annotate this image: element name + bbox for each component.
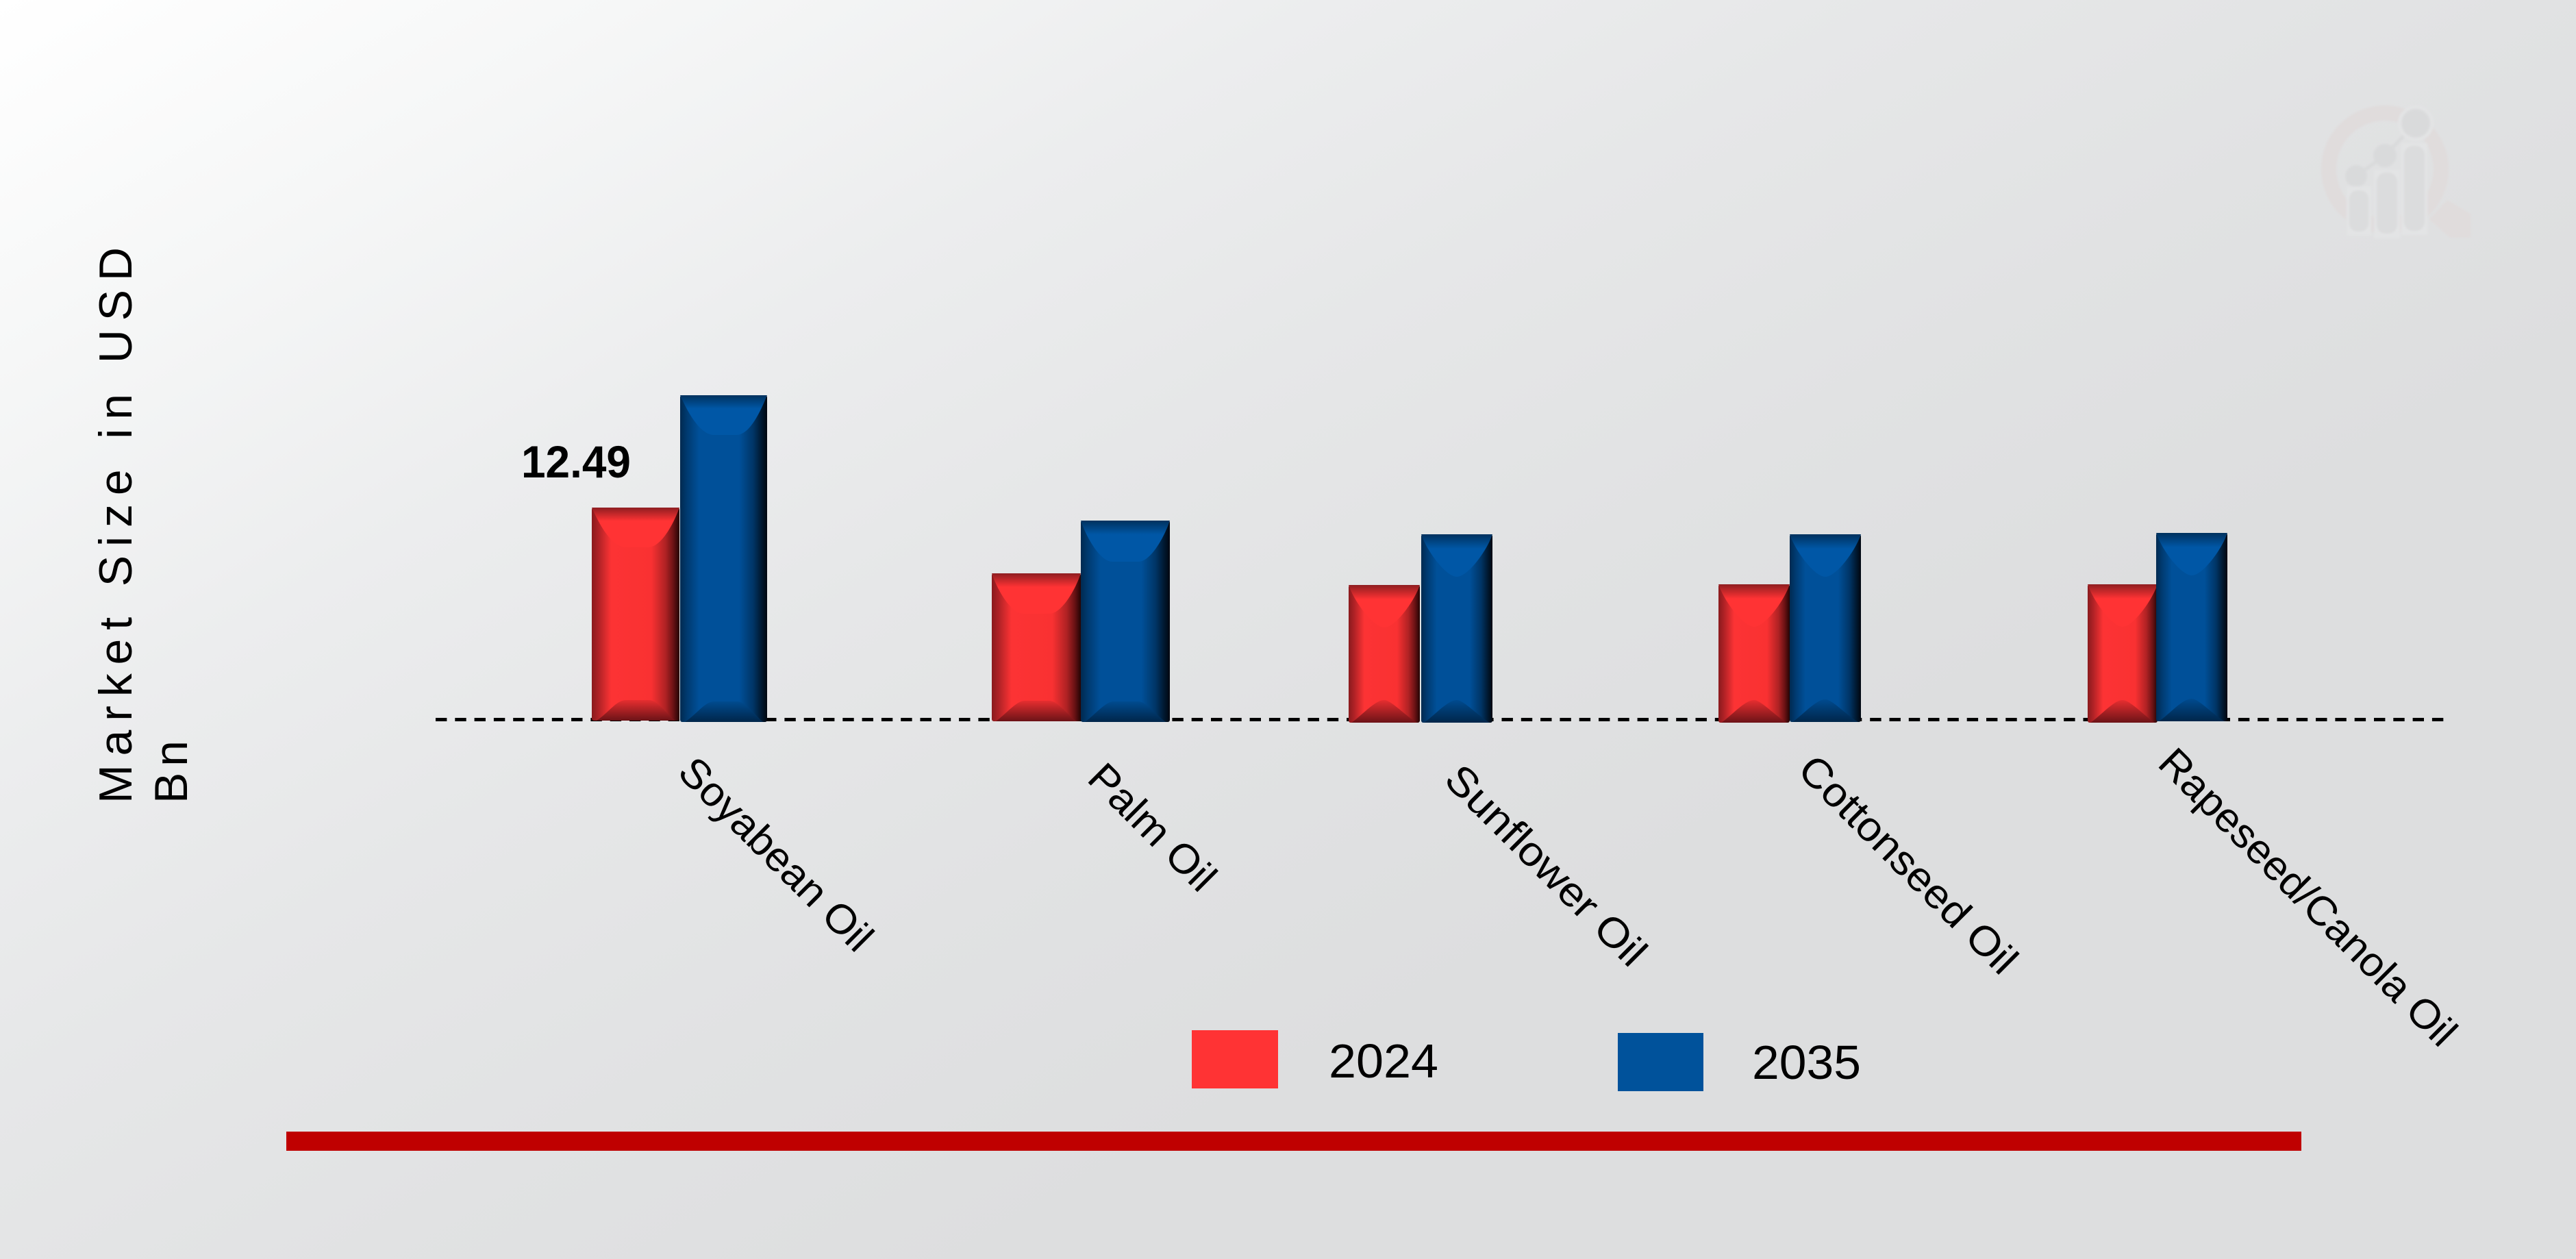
watermark logo icon — [2329, 105, 2471, 238]
legend swatch: 2035 — [1618, 1033, 1703, 1091]
legend swatch: 2024 — [1192, 1030, 1278, 1088]
category label: Cottonseed Oil: Cottonseed Oil — [1790, 746, 2027, 983]
bar: Palm Oil 2035 — [1081, 521, 1170, 722]
bar: Sunflower Oil 2035 — [1421, 534, 1492, 723]
bar: Soyabean Oil 2024 — [592, 508, 679, 721]
legend label: 2024: 2024 — [1329, 1034, 1438, 1088]
category label: Sunflower Oil: Sunflower Oil — [1436, 756, 1656, 975]
category label: Soyabean Oil: Soyabean Oil — [670, 748, 882, 960]
bar: Sunflower Oil 2024 — [1349, 585, 1420, 723]
value label: 12.49: 12.49 — [521, 436, 631, 487]
bar: Cottonseed Oil 2024 — [1718, 584, 1790, 723]
bar: Palm Oil 2024 — [992, 573, 1081, 721]
bars: Sunflower Oil — [1349, 534, 1492, 723]
bars: Soyabean Oil — [592, 395, 767, 722]
y axis title: Bn — [145, 740, 197, 803]
bars: Palm Oil — [992, 521, 1170, 722]
y axis title: Market Size in USD — [90, 247, 142, 803]
baseline dashed axis — [436, 718, 2447, 721]
bars: Rapeseed/Canola Oil — [2088, 533, 2227, 723]
bar: Cottonseed Oil 2035 — [1790, 534, 1861, 722]
red footer bar — [286, 1132, 2301, 1151]
category label: Rapeseed/Canola Oil: Rapeseed/Canola Oil — [2150, 739, 2466, 1056]
bar: Soyabean Oil 2035 — [680, 395, 767, 722]
legend — [1192, 1030, 1861, 1091]
y axis title — [90, 247, 197, 803]
bars: Cottonseed Oil — [1718, 534, 1861, 723]
bar: Rapeseed/Canola Oil 2024 — [2088, 584, 2158, 723]
legend label: 2035: 2035 — [1752, 1036, 1861, 1089]
category label: Palm Oil: Palm Oil — [1079, 754, 1225, 900]
bar: Rapeseed/Canola Oil 2035 — [2156, 533, 2227, 721]
